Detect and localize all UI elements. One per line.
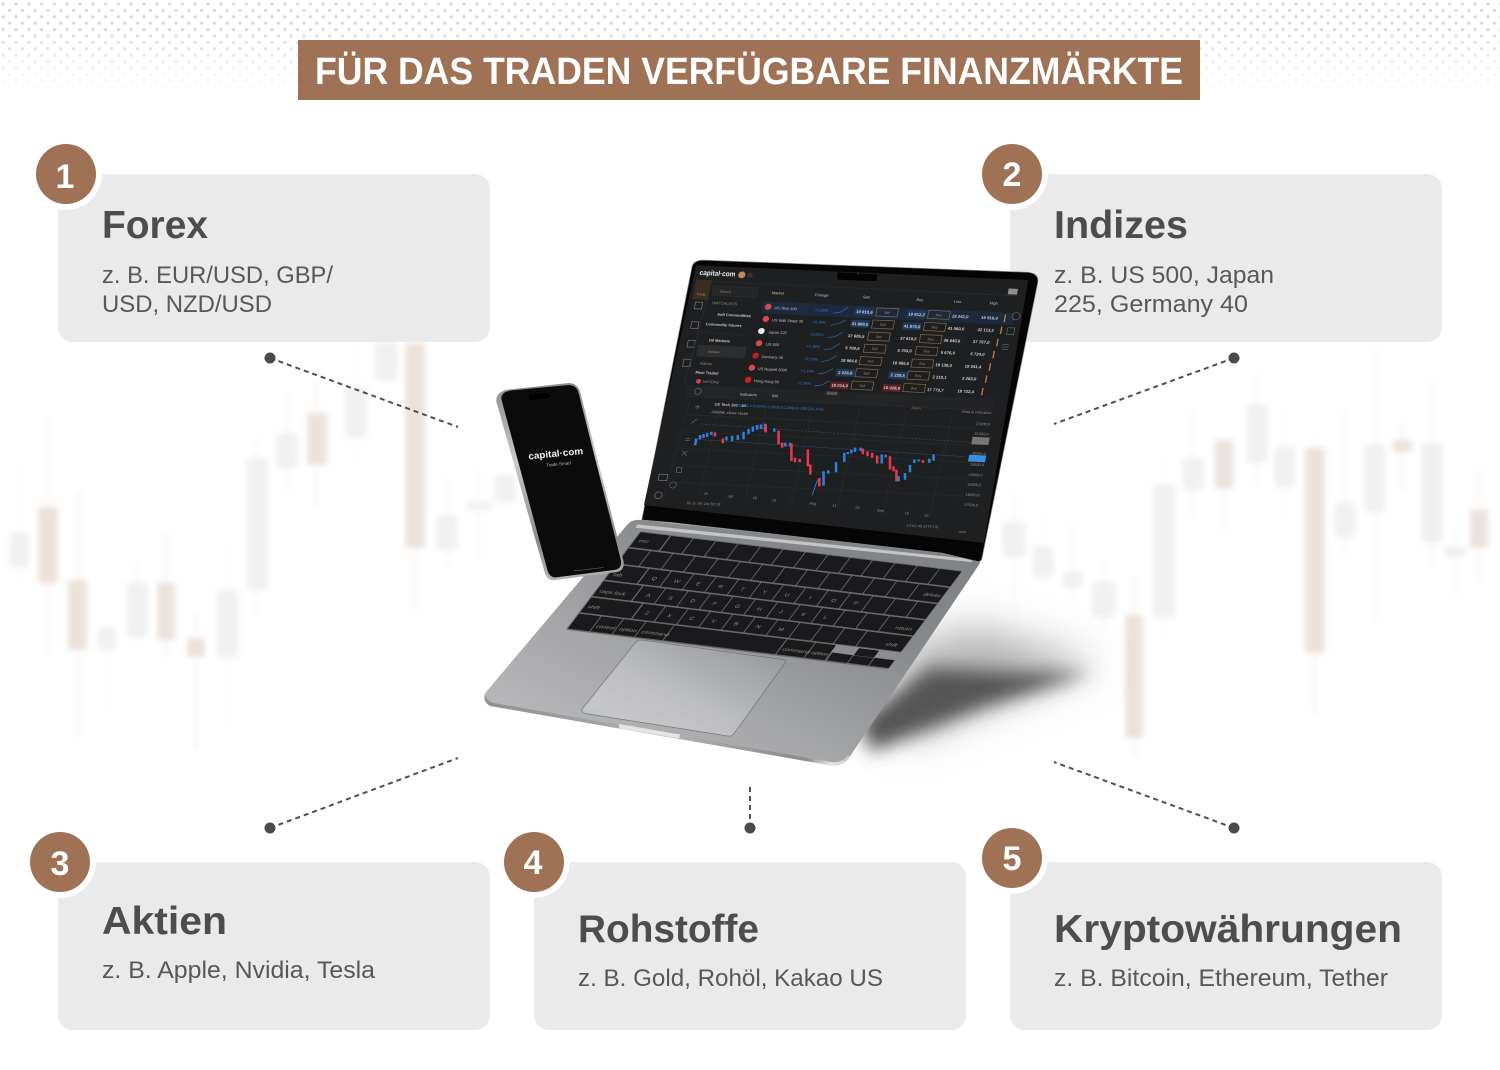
market table: Sell (859, 384, 866, 388)
market table: 5 724,0 (970, 351, 986, 357)
market table: Sell (867, 359, 874, 364)
connector 2: Indizes (1054, 352, 1240, 424)
panel: Indizes: 225, Germany 40 (1054, 291, 1248, 318)
time labels: 16 (752, 496, 757, 500)
time labels (684, 491, 971, 534)
chart header: JOH/HL close close (711, 410, 748, 416)
time labels: 11 (832, 504, 837, 508)
sidebar (654, 280, 712, 499)
watchlist column: Indices (699, 362, 713, 366)
watchlist column: NASDAQ (702, 380, 720, 385)
watchlist column: Soft Commodities (717, 313, 751, 318)
price labels: 17500,0 (964, 503, 979, 508)
keyboard: command (780, 647, 811, 655)
market table: 19 242,0 (951, 314, 970, 319)
market table: 18 965,5 (892, 360, 910, 366)
trackpad (582, 640, 786, 736)
watchlist column: Sell (863, 295, 870, 300)
keyboard: QWERTYUIOP (650, 577, 859, 606)
drawing tools (669, 404, 701, 489)
market table: Sell (884, 311, 891, 315)
panel: Kryptowährungen: Kryptowährungen (1054, 908, 1402, 951)
time labels: 5y 1y 3m 1m 5d 1d (686, 501, 721, 507)
chart toolbar: Indicators (740, 393, 757, 397)
watchlist column: Commodity futures (705, 322, 742, 328)
keyboard: control (594, 624, 616, 631)
connector 5: Kryptowährungen (1054, 762, 1240, 834)
market table: 42 113,2 (977, 327, 995, 333)
panel: Forex: z. B. EUR/USD, GBP/ (102, 262, 333, 289)
shadow under laptop (860, 625, 1098, 752)
market table (744, 300, 1021, 397)
time labels: 20 (855, 506, 860, 510)
market table: 37 619,5 (900, 336, 918, 341)
market table: 19 812,2 (908, 312, 926, 317)
price labels: 21000,0 (974, 432, 989, 436)
market table: US Russell 2000 (757, 367, 787, 372)
market table: Sell (863, 371, 870, 376)
chart header: Zoom (911, 406, 921, 410)
market table: 18 964,0 (840, 358, 859, 363)
panel: Kryptowährungen: z. B. Bitcoin, Ethereum, Tether (1054, 965, 1388, 992)
market table: 5 700,6 (845, 345, 861, 351)
market table: 19 810,6 (856, 309, 874, 315)
price labels: 19500,0 (970, 463, 984, 467)
time labels: Jul (727, 495, 733, 499)
panel: Aktien (24, 826, 490, 1030)
keyboard: caps lock (598, 590, 627, 597)
panel: Rohstoffe: Rohstoffe (578, 908, 759, 951)
candlestick chart (695, 424, 934, 495)
market table: Buy (927, 337, 934, 341)
title banner (298, 40, 1200, 100)
panel: Forex: 1 (56, 158, 74, 196)
chart grid (661, 397, 978, 518)
watchlist column: Market (771, 291, 785, 296)
panel: Indizes: 2 (1003, 156, 1021, 194)
market table: Sell (871, 347, 878, 351)
time labels: Sep (877, 509, 884, 513)
keyboard: delete (921, 592, 942, 599)
chart header: O19322.4 H19970.4 L19630.5 C19810.4 +286.2(+1.47%) (736, 404, 825, 412)
panel: Kryptowährungen (976, 822, 1442, 1030)
keyboard: command (640, 630, 670, 638)
time labels: 19 (771, 498, 776, 502)
keyboard: return (894, 626, 913, 632)
panel: Rohstoffe: z. B. Gold, Rohöl, Kakao US (578, 965, 883, 992)
laptop base (484, 520, 980, 766)
market table: 41 870,5 (903, 324, 922, 329)
market table: Sell (880, 323, 886, 327)
chart header: US Tech 100 · 1D (714, 403, 747, 408)
market table: 2 228,5 (890, 372, 906, 378)
keyboard: shift (586, 605, 601, 611)
market table: 36 640,0 (943, 338, 961, 343)
laptop (484, 260, 1038, 766)
market table: 19 916,4 (981, 315, 999, 321)
smartphone (496, 383, 624, 580)
keyboard: tab (611, 573, 623, 578)
watchlist column: Oil Markets (708, 339, 730, 343)
watchlist column: Most Traded (695, 371, 720, 376)
market table: Buy (911, 386, 918, 390)
app header (693, 268, 1028, 296)
connector 1: Forex (264, 352, 458, 427)
market table: 2 263,0 (962, 376, 978, 381)
market table: Hong Kong 50 (754, 379, 779, 384)
market table: 2 210,1 (932, 374, 948, 380)
market table: 5 703,0 (897, 348, 913, 353)
market table: +2,02% (810, 332, 825, 337)
keyboard: shift (884, 642, 899, 648)
panel: Aktien: z. B. Apple, Nvidia, Tesla (102, 957, 375, 984)
watchlist column: Low (954, 300, 962, 304)
market table: US 500 (766, 343, 779, 347)
market table: Buy (919, 362, 926, 366)
phone tagline: Trade Smart (546, 460, 572, 468)
market table: Buy (935, 313, 942, 317)
chart toolbar: Bid (772, 394, 778, 398)
laptop screen (644, 265, 1028, 543)
chart header: Data is indicative (961, 410, 992, 415)
sidebar: Trade (696, 292, 706, 297)
panel: Forex: Forex (102, 204, 208, 247)
chart header (682, 395, 993, 427)
market table: +1,38% (806, 345, 821, 349)
price labels (959, 422, 994, 508)
panel: Rohstoffe (498, 826, 966, 1030)
keyboard: ASDFGHJKL (644, 594, 829, 620)
watchlist column: Buy (916, 298, 924, 302)
market table: Japan 225 (768, 330, 787, 335)
blurred candlestick background: left (10, 342, 515, 750)
panel: Indizes: z. B. US 500, Japan (1054, 262, 1274, 289)
time labels: Aug (809, 502, 817, 506)
market table: Germany 40 (761, 355, 783, 360)
market table: US Tech 100 (774, 306, 797, 311)
market table: 37 685,5 (848, 333, 866, 339)
keyboard: option (809, 651, 830, 657)
keyboard (566, 531, 963, 669)
market table: 5 676,0 (940, 350, 956, 355)
market table: US Wall Street 30 (772, 318, 803, 324)
watchlist column (691, 286, 999, 397)
watchlist column: Change (814, 293, 829, 298)
market table: 18 014,0 (831, 383, 849, 388)
app header: capital·com (699, 268, 737, 279)
keyboard: esc (637, 539, 650, 545)
phone logo: capital·com (528, 446, 584, 462)
time labels: 17:01:45 (UTC+3) (906, 524, 939, 529)
market table: 18 722,4 (957, 389, 975, 394)
keyboard: ZXCVBNM (643, 611, 785, 633)
market table: 37 757,0 (973, 339, 991, 345)
connector 4: Rohstoffe (744, 786, 756, 834)
panel: Forex: USD, NZD/USD (102, 291, 272, 318)
price labels: 20000,0 (971, 452, 986, 456)
market table: 19 041,4 (964, 364, 982, 369)
title banner: FÜR DAS TRADEN VERFÜGBARE FINANZMÄRKTE (315, 50, 1183, 93)
market table: Sell (875, 335, 882, 339)
blurred candlestick background: right (1003, 347, 1488, 757)
time labels: Jn (703, 492, 708, 496)
watchlist column: Indices (708, 350, 720, 354)
price labels: 21000,0 (975, 422, 990, 427)
watchlist column: WATCHLISTS (712, 301, 738, 306)
market table: Buy (923, 349, 930, 354)
market table: 2 226,8 (838, 370, 854, 376)
market table: +0,76% (812, 320, 827, 325)
market table: 19 138,0 (935, 362, 953, 368)
market table: 18 028,0 (883, 385, 901, 391)
panel: Rohstoffe: 4 (524, 844, 543, 882)
chart toolbar (686, 385, 995, 411)
market table: +2,19% (804, 357, 818, 362)
market table: 41 868,5 (851, 321, 869, 327)
price labels: 18000,0 (965, 493, 980, 497)
market table: Buy (915, 374, 922, 378)
time labels: auto (959, 530, 966, 534)
time labels: 10 (904, 511, 909, 516)
front edge (485, 695, 850, 766)
panel: Indizes (976, 138, 1442, 342)
price labels: 19000,0 (968, 473, 983, 477)
background dot pattern (2, 2, 1500, 80)
market table: +2,06% (797, 381, 812, 386)
price labels: 18500,0 (967, 483, 982, 487)
panel: Kryptowährungen: 5 (1003, 840, 1021, 878)
laptop lid (642, 260, 1038, 562)
watchlist column: Search (719, 290, 731, 294)
back deck highlight (636, 524, 972, 562)
panel: Forex (30, 138, 490, 342)
market table: 41 060,0 (947, 326, 966, 331)
chart reference lines (694, 424, 973, 457)
market table: 17 773,7 (927, 387, 945, 393)
panel: Indizes: Indizes (1054, 204, 1188, 247)
panel: Aktien: Aktien (102, 900, 227, 943)
connector 3: Aktien (264, 758, 458, 834)
time labels: 16 (924, 514, 929, 518)
market table: +1,19% (800, 369, 815, 374)
keyboard: option (618, 627, 638, 634)
panel: Aktien: 3 (51, 845, 69, 883)
watchlist column: High (989, 301, 998, 306)
market table: +2,18% (814, 308, 829, 313)
market table: Buy (931, 325, 938, 329)
